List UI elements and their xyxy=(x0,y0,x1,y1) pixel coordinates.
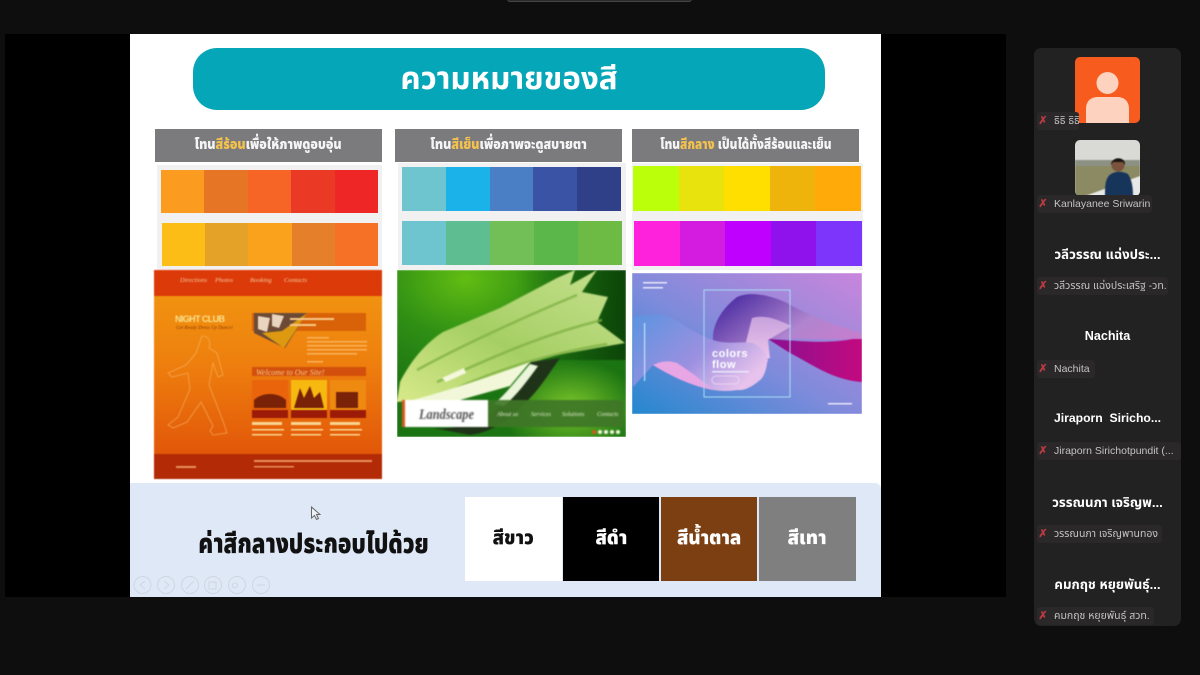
muted mic icons xyxy=(1038,115,1048,622)
image: night club website xyxy=(153,269,383,480)
image: night club website: Get Ready Dress Up Dance! xyxy=(176,326,233,331)
panel: hot swatch backing xyxy=(157,165,382,270)
panel: participants sidebar xyxy=(1034,48,1181,626)
muted mic icons: ✗ xyxy=(1038,115,1048,127)
muted mic icons: ✗ xyxy=(1038,280,1048,292)
label: participant 7 xyxy=(1037,607,1154,625)
image: colors flow poster: colors xyxy=(712,348,748,360)
neutral palette 2 xyxy=(634,221,862,266)
label: Jiraporn: Jiraporn Sirichotpundit (... xyxy=(1054,445,1174,457)
image: night club website: Directions xyxy=(179,277,208,284)
label: participant 3 xyxy=(1037,277,1168,295)
label: participant 1: ธิธิ ธิธิ xyxy=(1054,115,1080,127)
slide xyxy=(130,34,881,597)
image: night club website: Welcome to Our Site! xyxy=(256,368,325,377)
neutral palette 1 xyxy=(633,166,861,211)
heading: hot tones xyxy=(155,129,382,162)
label: participant 1 xyxy=(1037,112,1079,130)
swatch: white xyxy=(465,497,562,581)
swatch: black xyxy=(563,497,659,581)
slideshow controls xyxy=(134,576,270,594)
label: participant 7: คมกฤช หยุยพันธุ์ สวท. xyxy=(1054,610,1150,622)
heading: hot tones: โทนสีร้อนเพื่อให้ภาพดูอบอุ่น xyxy=(195,137,342,153)
name: Nachita: Nachita xyxy=(1085,329,1130,343)
label: Nachita xyxy=(1037,360,1095,378)
muted mic icons: ✗ xyxy=(1038,610,1048,622)
muted mic icons: ✗ xyxy=(1038,528,1048,540)
swatch: brown xyxy=(661,497,757,581)
swatch: black: สีดำ xyxy=(595,528,627,549)
heading: neutral tones xyxy=(632,129,859,162)
name: participant 6: วรรณนภา เจริญพ... xyxy=(1052,495,1163,510)
image: colors flow poster xyxy=(632,273,862,414)
name: participant 3: วลีวรรณ แฉ่งประ... xyxy=(1054,247,1161,262)
cool palette 1 xyxy=(402,167,621,211)
swatch: grey xyxy=(759,497,856,581)
label: Jiraporn xyxy=(1037,442,1181,460)
image: green leaf landscape xyxy=(397,270,626,437)
label: Kanlayanee Sriwarin xyxy=(1037,195,1152,213)
label: Nachita: Nachita xyxy=(1054,363,1090,375)
muted mic icons: ✗ xyxy=(1038,363,1048,375)
image: night club website: Booking xyxy=(250,277,272,284)
hot palette 2 xyxy=(162,223,378,266)
hot palette 1 xyxy=(161,170,378,213)
label: participant 6 xyxy=(1037,525,1162,543)
window control at top edge xyxy=(507,0,692,2)
shared video area xyxy=(5,34,1006,597)
heading: cool tones: โทนสีเย็นเพื่อภาพจะดูสบายตา xyxy=(430,137,587,153)
tile: orange avatar xyxy=(1075,57,1140,123)
image: green leaf landscape: Landscape xyxy=(418,407,474,423)
panel: cool swatch backing xyxy=(398,163,626,270)
muted mic icons: ✗ xyxy=(1038,198,1048,210)
image: green leaf landscape: Contacts xyxy=(597,412,619,418)
title banner: ความหมายของสี xyxy=(400,61,618,96)
name: Jiraporn: Jiraporn Siricho... xyxy=(1054,411,1161,425)
label: participant 3: วลีวรรณ แฉ่งประเสริฐ -วท. xyxy=(1054,280,1167,292)
image: green leaf landscape: About us xyxy=(496,412,519,418)
cool palette 2 xyxy=(402,221,622,265)
image: night club website: Photos xyxy=(214,277,234,284)
swatch: brown: สีน้ำตาล xyxy=(677,528,741,549)
image: green leaf landscape: Solutions xyxy=(562,412,585,418)
heading: cool tones xyxy=(395,129,622,162)
swatch: white: สีขาว xyxy=(493,528,534,549)
icon: mouse cursor xyxy=(311,506,321,520)
image: colors flow poster: flow xyxy=(712,359,736,371)
tile: photo of participant xyxy=(1075,140,1140,196)
label: Kanlayanee Sriwarin: Kanlayanee Sriwarin xyxy=(1054,198,1150,210)
title banner xyxy=(193,48,825,110)
swatch: grey: สีเทา xyxy=(788,528,827,549)
text: neutral colours label: ค่าสีกลางประกอบไปด้วย xyxy=(199,529,429,559)
panel: neutral colours band xyxy=(130,483,881,597)
muted mic icons: ✗ xyxy=(1038,445,1048,457)
name: participant 7: คมกฤช หยุยพันธุ์... xyxy=(1054,577,1161,592)
panel: neutral swatch backing xyxy=(632,163,863,270)
label: participant 6: วรรณนภา เจริญพานทอง xyxy=(1054,528,1158,540)
image: night club website: NIGHT CLUB xyxy=(175,314,226,324)
image: night club website: Contacts xyxy=(284,277,308,284)
heading: neutral tones: โทนสีกลาง เป็นได้ทั้งสีร้อนและเย็น xyxy=(660,137,831,153)
image: green leaf landscape: Services xyxy=(531,412,552,418)
